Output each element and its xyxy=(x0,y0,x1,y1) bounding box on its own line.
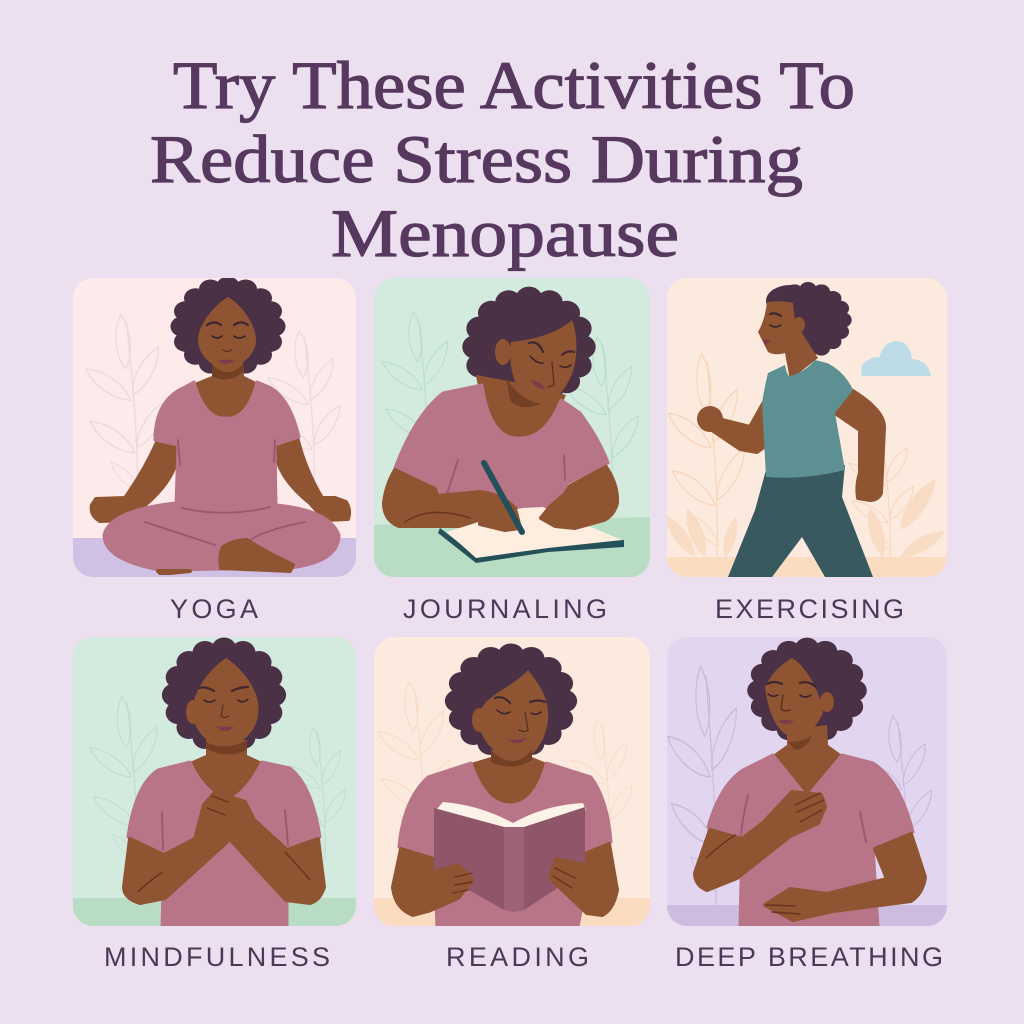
plants: journaling xyxy=(381,311,639,474)
figure: runner xyxy=(697,282,884,577)
panel: exercising xyxy=(660,278,948,577)
plants: exercising xyxy=(665,353,918,557)
panel: deep breathing xyxy=(664,637,947,926)
plants: yoga xyxy=(82,314,346,500)
panel: yoga xyxy=(73,276,356,577)
plants: mindfulness xyxy=(86,696,350,870)
plant base leaves: exercising xyxy=(667,479,945,557)
label: exercising: EXERCISING xyxy=(715,594,904,624)
icon: open journal xyxy=(438,507,624,563)
figure: reader xyxy=(393,644,617,927)
figure: breathing woman xyxy=(695,638,925,926)
label: mindfulness: MINDFULNESS xyxy=(104,942,330,972)
plants: deep breathing xyxy=(664,666,937,905)
label: journaling: JOURNALING xyxy=(403,594,607,624)
panel: reading xyxy=(374,637,650,927)
label: yoga: YOGA xyxy=(170,594,258,624)
title: Try These Activities To xyxy=(173,47,855,123)
title xyxy=(150,47,855,271)
figure: yoga woman xyxy=(92,276,349,573)
label: deep breathing: DEEP BREATHING xyxy=(675,942,943,972)
icon: cloud xyxy=(861,341,931,376)
figure: hands on heart xyxy=(124,638,324,927)
plants: reading xyxy=(377,681,632,823)
panel: journaling xyxy=(374,278,650,577)
label: reading: READING xyxy=(446,942,589,972)
title: Reduce Stress During xyxy=(150,121,803,197)
figure: journaling woman xyxy=(384,287,624,563)
title: Menopause xyxy=(331,195,679,271)
panel: mindfulness xyxy=(73,637,356,927)
icon: open book xyxy=(434,802,586,912)
